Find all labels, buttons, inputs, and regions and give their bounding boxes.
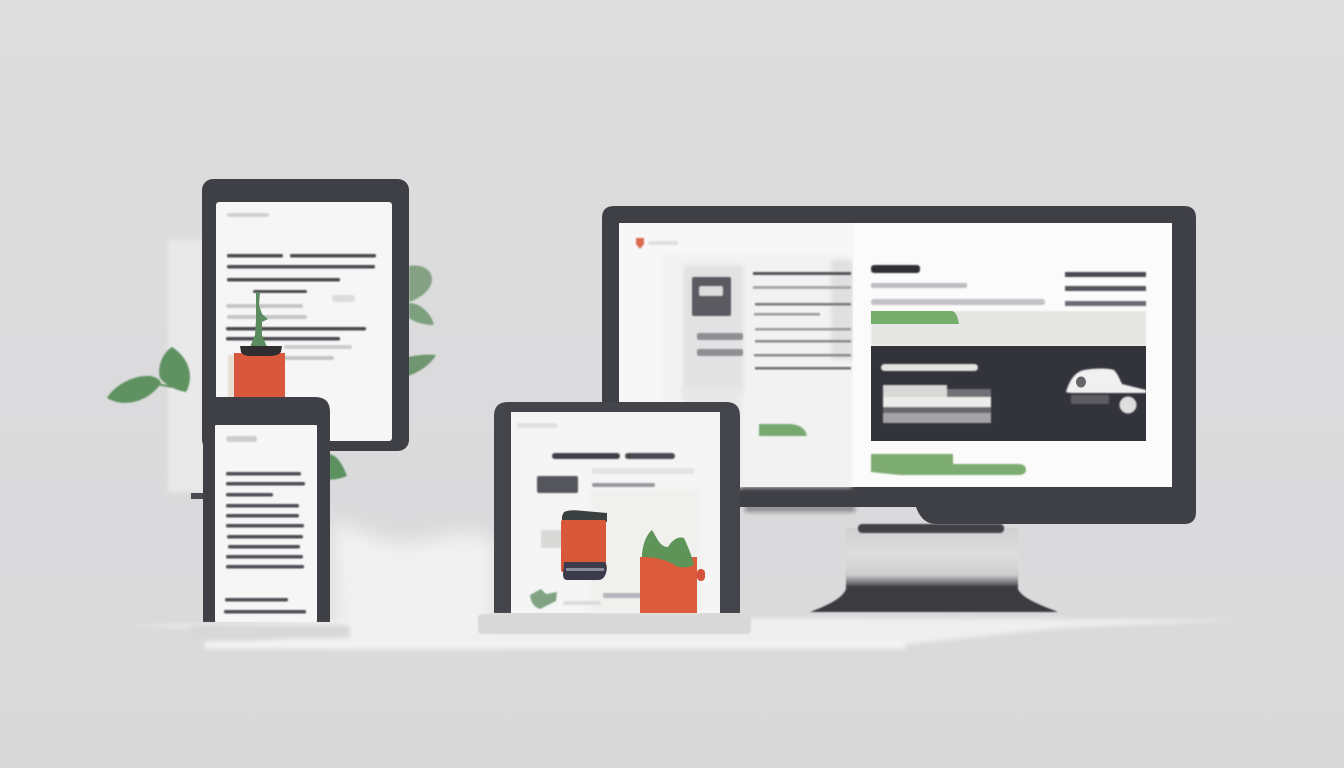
monitor: right content panel (853, 223, 1172, 487)
leaf on left of tablet (107, 347, 229, 403)
monitor stand (810, 524, 1058, 612)
laptop: red cup (561, 510, 607, 580)
phone base shadow (190, 625, 350, 638)
monitor: header icons (636, 237, 1135, 251)
laptop: small green blob (530, 589, 557, 609)
laptop screen content (517, 423, 694, 605)
tablet (202, 179, 409, 451)
monitor (602, 206, 1196, 524)
smoke cloud (332, 522, 495, 640)
tablet text lines (226, 213, 376, 360)
desk surface highlight (128, 618, 1238, 649)
leaves right of tablet (408, 266, 436, 376)
monitor: left blurred column (662, 255, 853, 488)
phone (191, 397, 330, 622)
monitor shadow (745, 505, 855, 512)
ghost panel behind tablet (168, 240, 218, 492)
laptop: potted plant (640, 530, 705, 613)
phone text lines (224, 436, 306, 614)
leaf under tablet (324, 454, 347, 480)
monitor: dark banner (871, 346, 1146, 441)
laptop base (478, 614, 751, 634)
laptop (478, 402, 751, 634)
potted plant (228, 292, 285, 399)
